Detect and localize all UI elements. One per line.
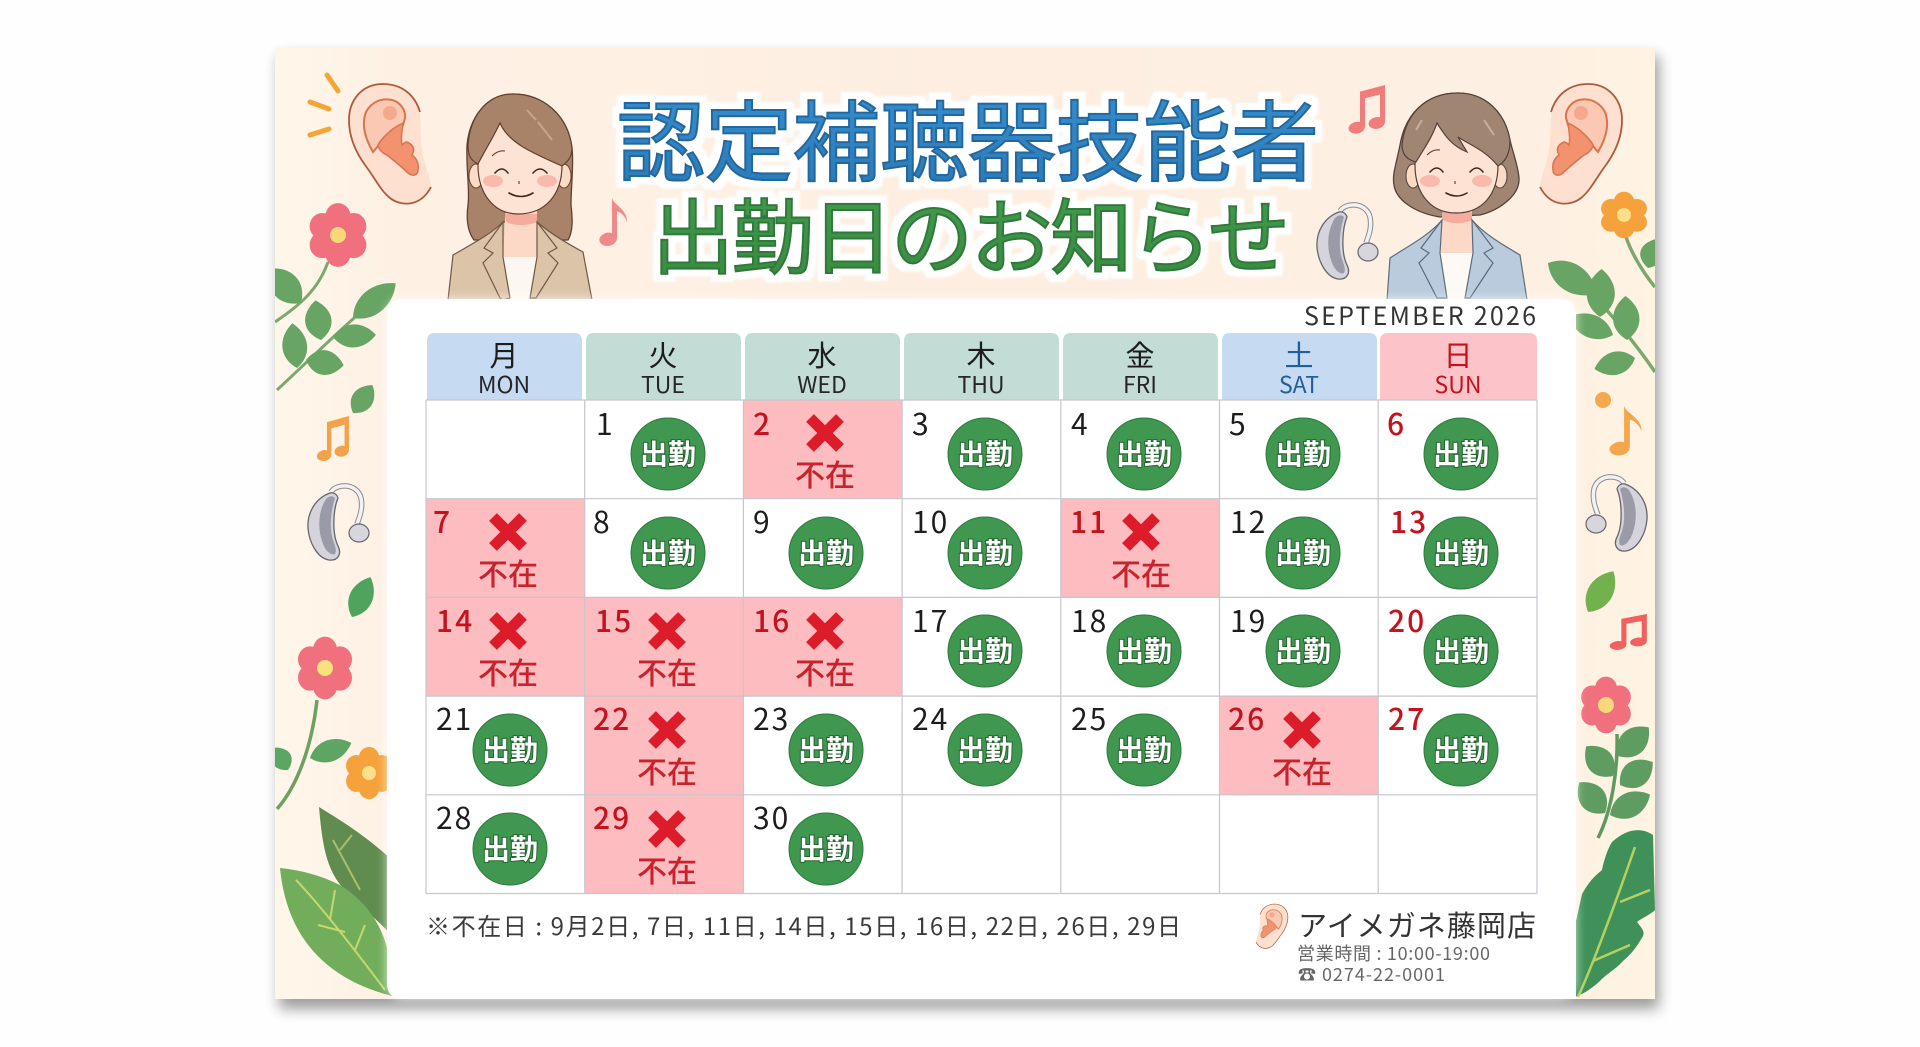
cell 17: 出勤	[957, 630, 1013, 670]
cell 12: 12	[1230, 498, 1267, 542]
icon: right hearing aid	[1586, 477, 1647, 551]
cell 16 absent: 16	[753, 597, 791, 641]
cell 18	[1071, 597, 1181, 687]
cell 12: 出勤	[1275, 532, 1331, 572]
cell 14 absent: 14	[436, 597, 474, 641]
icon: right red note	[1610, 614, 1647, 650]
card shadow	[387, 299, 1576, 999]
cell 24	[912, 695, 1022, 786]
cell 1: 1	[596, 400, 615, 444]
cell 29 absent: 不在	[637, 847, 697, 891]
cell 5	[1229, 400, 1340, 490]
cell 22 absent	[585, 695, 743, 795]
cell 17: 17	[912, 597, 949, 641]
cell 21	[436, 695, 547, 786]
cell 9: 9	[753, 498, 772, 542]
header: Thursday	[904, 333, 1059, 400]
header: Saturday: 土	[1284, 333, 1314, 375]
icon: sound rays	[310, 75, 338, 135]
header: Tuesday: 火	[648, 333, 678, 375]
header: Friday: 金	[1125, 333, 1155, 375]
cell 8	[593, 498, 705, 589]
cell 26 absent: 不在	[1272, 748, 1332, 792]
cell 11 absent: 不在	[1111, 550, 1171, 594]
cell 28: 出勤	[482, 828, 538, 868]
right upper flower branch	[1548, 192, 1655, 376]
header: Saturday: SAT	[1279, 366, 1319, 400]
cell 5: 出勤	[1275, 433, 1331, 473]
header: Thursday: THU	[957, 366, 1005, 400]
cell 14 absent	[426, 597, 585, 696]
cell 23	[753, 695, 863, 786]
cell 25: 25	[1071, 695, 1108, 739]
icon: music note red	[1349, 85, 1385, 134]
cell 25	[1071, 695, 1181, 786]
cell 27	[1388, 695, 1498, 786]
cell 19: 19	[1230, 597, 1267, 641]
cell 1: 出勤	[640, 433, 696, 473]
cell 12	[1230, 498, 1340, 589]
cell 4	[1071, 400, 1181, 490]
cell 2 absent: 不在	[795, 451, 855, 495]
month label: SEPTEMBER 2026	[1304, 297, 1536, 333]
cell 29 absent: 29	[593, 794, 631, 838]
cell 2 absent	[743, 400, 902, 499]
right woman	[1387, 93, 1527, 300]
header: Tuesday	[586, 333, 741, 400]
cell 29 absent	[585, 794, 743, 894]
cell 24: 出勤	[957, 729, 1013, 769]
icon: left hearing aid	[308, 486, 369, 560]
calendar cells	[426, 400, 1498, 894]
cell 25: 出勤	[1116, 729, 1172, 769]
header: Sunday: 日	[1443, 333, 1473, 375]
cell 7 absent	[426, 498, 585, 597]
header: Wednesday: 水	[807, 333, 837, 375]
cell 3	[912, 400, 1022, 490]
cell 13	[1390, 498, 1498, 589]
cell 28: 28	[436, 794, 473, 838]
title	[617, 73, 1319, 291]
cell 21: 出勤	[482, 729, 538, 769]
header: Thursday: 木	[966, 333, 996, 375]
cell 27: 27	[1388, 695, 1426, 739]
icon: right ear	[1540, 84, 1622, 204]
cell 13: 出勤	[1433, 532, 1489, 572]
cell 9	[753, 498, 863, 589]
cell 27: 出勤	[1433, 729, 1489, 769]
cell 19: 出勤	[1275, 630, 1331, 670]
left big leaves	[280, 807, 392, 996]
cell 15 absent: 15	[595, 597, 633, 641]
cell 4: 4	[1071, 400, 1090, 444]
cell 20: 20	[1388, 597, 1426, 641]
shop info	[1297, 903, 1536, 987]
left upper flower branch	[275, 203, 396, 414]
cell 16 absent	[743, 597, 902, 696]
icon: music note pink	[599, 198, 627, 246]
cell 20: 出勤	[1433, 630, 1489, 670]
cell 30	[753, 794, 863, 885]
cell 14 absent: 不在	[478, 649, 538, 693]
header: Friday	[1063, 333, 1218, 400]
cell 30: 出勤	[798, 828, 854, 868]
cell 16 absent: 不在	[795, 649, 855, 693]
cell 13: 13	[1390, 498, 1428, 542]
icon: hearing aid top	[1317, 205, 1378, 279]
header: Monday: 月	[489, 333, 519, 375]
cell 23: 出勤	[798, 729, 854, 769]
title line 1: 認定補聴器技能者	[617, 73, 1319, 200]
header: Saturday	[1222, 333, 1377, 400]
cell 9: 出勤	[798, 532, 854, 572]
cell 7 absent: 7	[433, 498, 452, 542]
cell 21: 21	[436, 695, 473, 739]
cell 30: 30	[753, 794, 790, 838]
icon: right green leaf	[1578, 565, 1624, 619]
cell 6	[1387, 400, 1498, 490]
opening hours: 営業時間 : 10:00-19:00	[1297, 940, 1490, 966]
cell 19	[1230, 597, 1340, 687]
cell 2 absent: 2	[753, 400, 772, 444]
title line 2: 出勤日のお知らせ	[652, 172, 1290, 291]
icon: left orange note	[317, 416, 349, 461]
left lower flowers	[266, 637, 392, 809]
header: Sunday	[1380, 333, 1537, 400]
cell 7 absent: 不在	[478, 550, 538, 594]
right big leaf	[1570, 830, 1655, 999]
poster shadow	[279, 56, 1659, 1009]
header: Monday	[427, 333, 582, 400]
calendar header	[427, 333, 1537, 400]
icon: orange dot	[1595, 392, 1611, 408]
cell 3: 出勤	[957, 433, 1013, 473]
header: Monday: MON	[478, 366, 530, 400]
header: Friday: FRI	[1123, 366, 1157, 400]
cell 3: 3	[912, 400, 931, 444]
cell 8: 出勤	[640, 532, 696, 572]
icon: shop ear logo	[1256, 904, 1288, 948]
cell 11 absent: 11	[1070, 498, 1108, 542]
cell 26 absent: 26	[1228, 695, 1266, 739]
cell 22 absent: 不在	[637, 748, 697, 792]
cell 6: 出勤	[1433, 433, 1489, 473]
shop name: アイメガネ藤岡店	[1298, 903, 1536, 945]
left woman	[448, 94, 592, 300]
cell 22 absent: 22	[593, 695, 631, 739]
cell 1	[596, 400, 705, 490]
absence dates note: ※不在日 : 9月2日, 7日, 11日, 14日, 15日, 16日, 22日, 26日, 29日	[426, 907, 1181, 942]
cell 17	[912, 597, 1022, 687]
cell 15 absent: 不在	[637, 649, 697, 693]
panel: calendar card	[387, 299, 1576, 999]
cell 10	[912, 498, 1022, 589]
header: Wednesday	[745, 333, 900, 400]
cell 28	[436, 794, 547, 885]
cell 26 absent	[1220, 695, 1378, 795]
icon: left green leaf	[342, 572, 381, 622]
header: Tuesday: TUE	[641, 366, 685, 400]
cell 8: 8	[593, 498, 612, 542]
cell 20	[1388, 597, 1498, 687]
poster background	[275, 48, 1655, 999]
icon: right orange note	[1610, 406, 1641, 456]
header: Sunday: SUN	[1435, 366, 1481, 400]
cell 18: 18	[1071, 597, 1108, 641]
cell 10: 出勤	[957, 532, 1013, 572]
cell 24: 24	[912, 695, 949, 739]
icon: left ear	[349, 84, 431, 204]
cell 18: 出勤	[1116, 630, 1172, 670]
right lower flower	[1569, 677, 1660, 838]
cell 23: 23	[753, 695, 790, 739]
cell 15 absent	[585, 597, 743, 696]
phone number: ☎ 0274-22-0001	[1298, 961, 1445, 987]
cell 10: 10	[912, 498, 949, 542]
cell 4: 出勤	[1116, 433, 1172, 473]
cell 6: 6	[1387, 400, 1406, 444]
cell 5: 5	[1229, 400, 1248, 444]
cell 11 absent	[1061, 498, 1220, 597]
header: Wednesday: WED	[797, 366, 847, 400]
